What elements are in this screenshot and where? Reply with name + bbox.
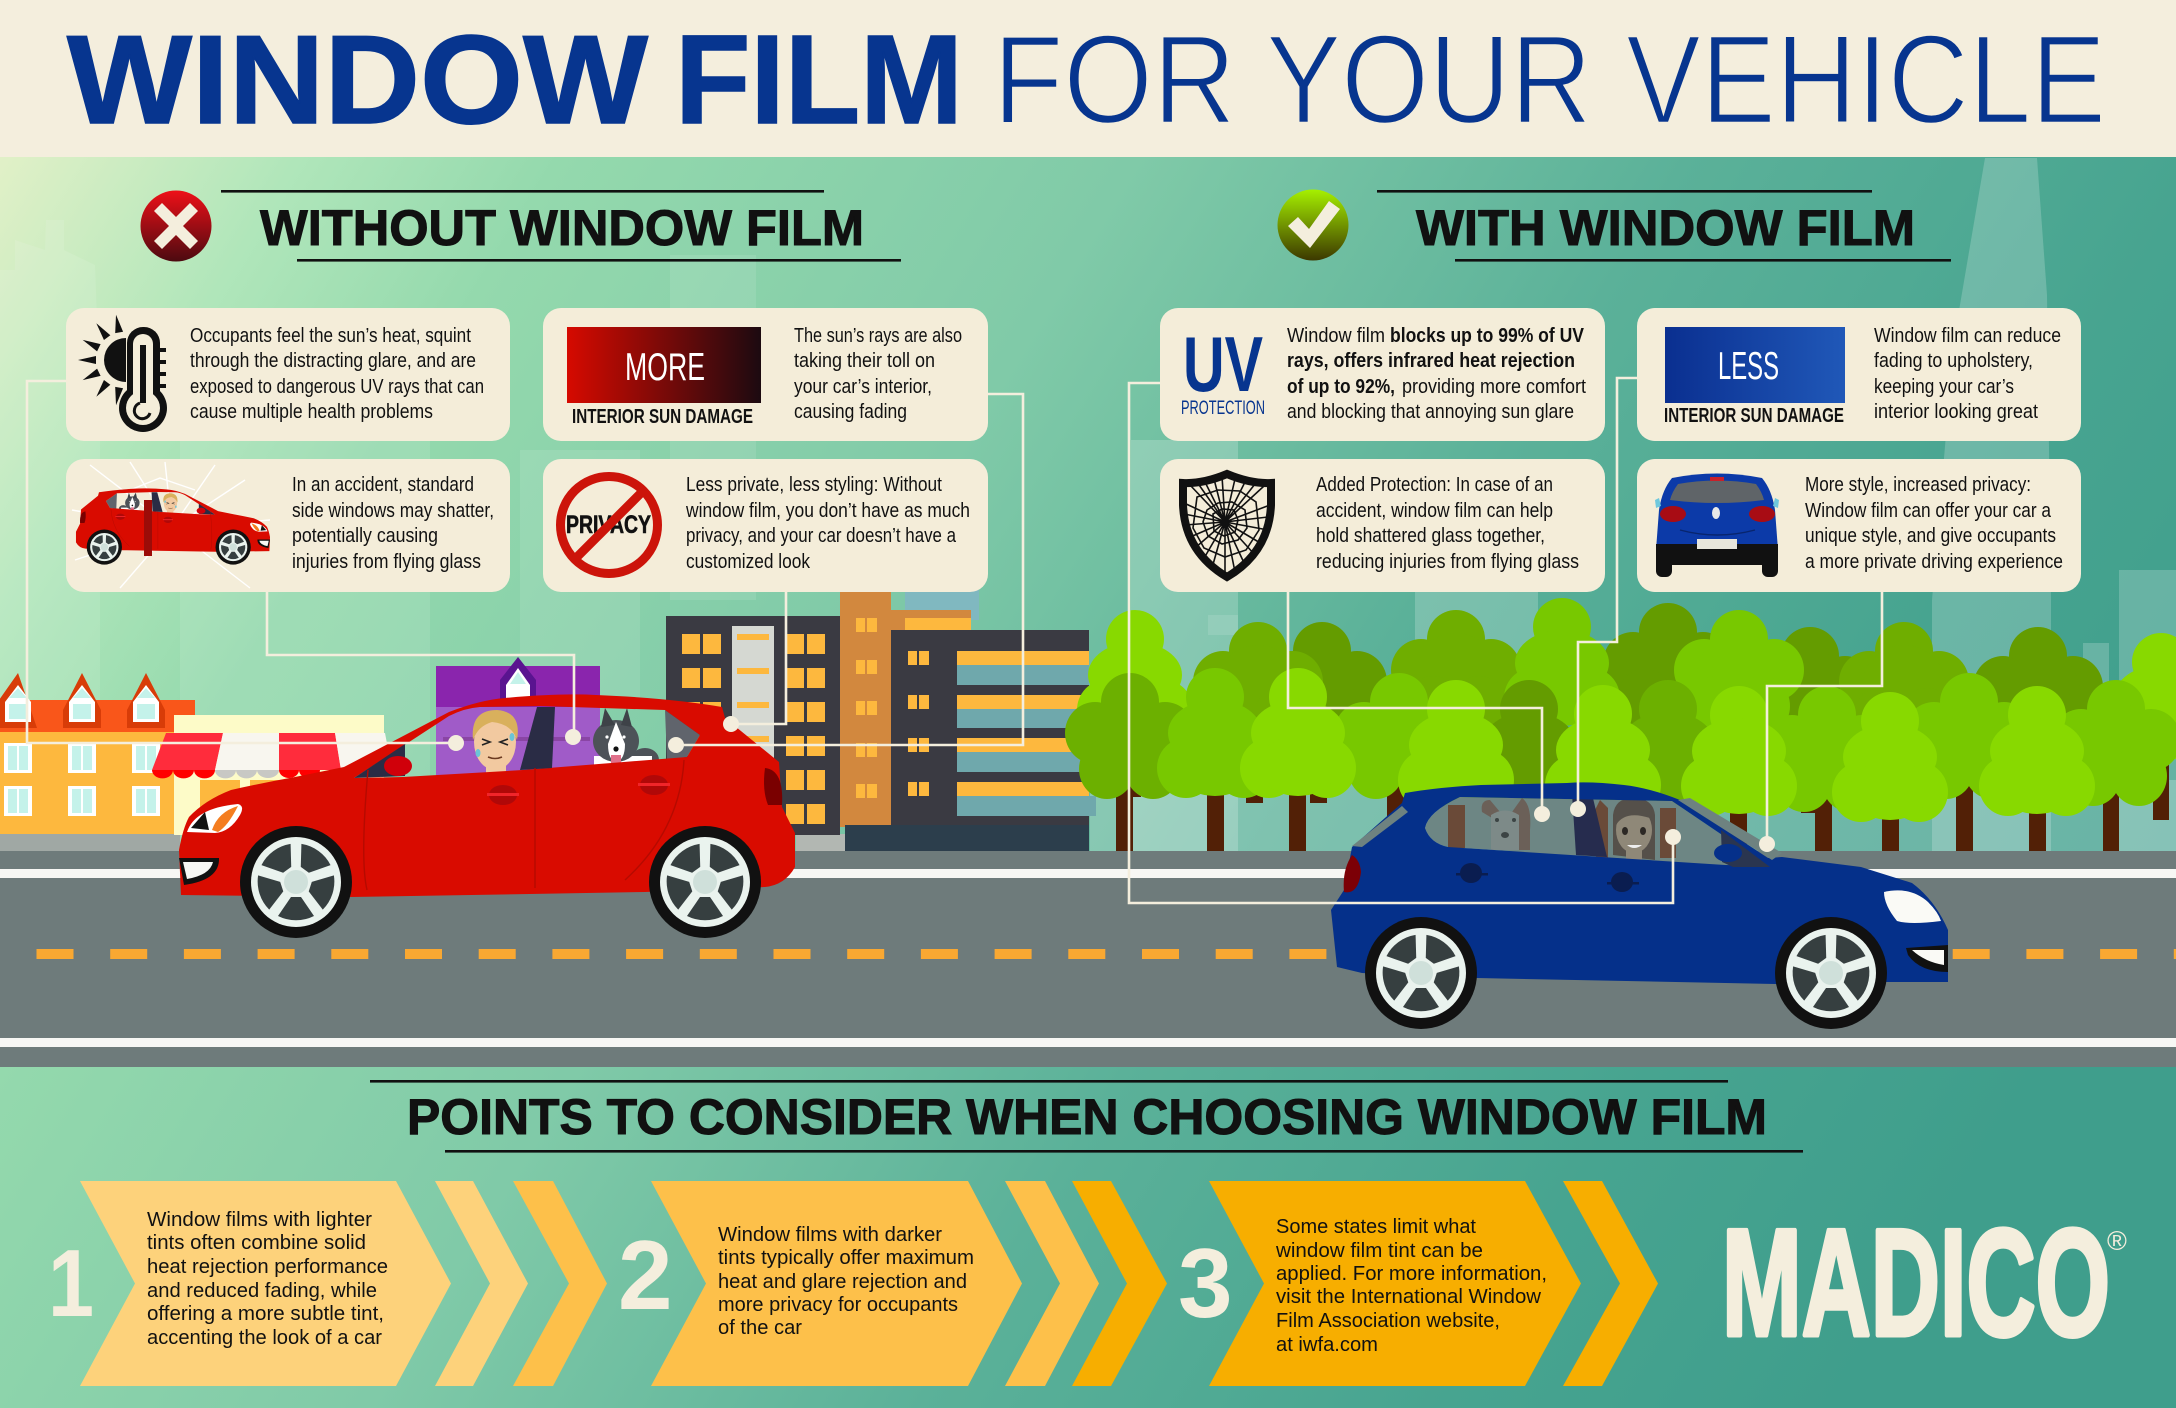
label: interior sun damage: INTERIOR SUN DAMAGE [1664,405,1844,427]
panel: heat and glare [66,308,510,441]
text: heat and glare: cause multiple health problems [190,401,433,423]
title: window film: WINDOW [67,9,648,150]
text: uv protection: Window film [1287,325,1385,347]
callout connector lines [27,378,1882,903]
text: uv protection: rays, offers infrared heat rejection [1287,350,1575,372]
road [0,851,2176,1067]
text: less private [685,474,970,573]
number 3: 3 [1178,1228,1233,1338]
text: fading: The sun’s rays are also [794,325,962,347]
text: point 1: tints often combine solid [147,1232,366,1254]
icon: no privacy [560,476,658,574]
title: for your vehicle: FOR [993,9,1236,150]
title: window film: FILM [675,9,963,150]
logo: madico: ® [2107,1226,2127,1256]
text: heat and glare: exposed to dangerous UV rays that can [190,376,484,398]
text: shattered windows [292,474,494,573]
text: fading [794,325,962,423]
text: uv protection: blocks up to 99% of UV [1390,325,1585,347]
text: fading: causing fading [794,401,907,423]
callout dots [448,716,1775,852]
badge: less: LESS [1718,345,1779,388]
blue car [1331,782,1948,1029]
text: point 3 [1275,1216,1547,1356]
text: point 1: offering a more subtle tint, [147,1303,384,1325]
number 1: 1 [48,1230,94,1337]
panel: shattered windows [66,459,510,592]
text: more style: a more private driving experience [1805,551,2063,573]
text: less fading: Window film can reduce [1874,325,2061,347]
text: uv protection: providing more comfort [1402,376,1586,398]
chevrons 1 [435,1181,607,1386]
heading: points to consider: POINTS TO CONSIDER WHEN CHOOSING WINDOW FILM [407,1089,1767,1145]
text: point 1: Window films with lighter [147,1209,372,1231]
skyline silhouettes [0,158,2176,851]
text: uv protection: and blocking that annoying sun glare [1287,401,1574,423]
heading: with window film: WITH WINDOW FILM [1416,200,1915,256]
text: more style: More style, increased privacy: [1805,474,2031,496]
trees [1065,598,2176,851]
icon: no privacy: PRIVACY [566,511,651,539]
text: point 2 [718,1224,974,1339]
text: less fading: fading to upholstery, [1874,350,2033,372]
text: more style: Window film can offer your car a [1805,500,2052,522]
red car [179,694,795,938]
text: point 1: and reduced fading, while [147,1280,377,1302]
text: point 3: applied. For more information, [1276,1263,1547,1285]
text: less fading [1874,325,2061,423]
text: point 2: of the car [718,1317,802,1339]
text: point 2: more privacy for occupants [718,1294,958,1316]
text: point 1: accenting the look of a car [147,1327,382,1349]
point 1 [48,1181,607,1386]
panel: less interior damage [1637,308,2081,441]
text: fading: your car’s interior, [794,376,932,398]
buildings: left street [0,590,1096,851]
text: uv protection: of up to 92%, [1287,376,1395,398]
text: added protection: accident, window film can help [1316,500,1553,522]
title: for your vehicle: YOUR [1266,9,1592,150]
text: added protection [1316,474,1579,573]
text: less private: Less private, less styling: Without [686,474,942,496]
point 3 [1178,1181,1658,1386]
text: point 3: Film Association website, [1276,1310,1500,1332]
text: shattered windows: side windows may shatter, [292,500,494,522]
icon: red x [140,190,212,262]
text: point 3: visit the International Window [1276,1286,1542,1308]
text: added protection: reducing injuries from flying glass [1316,551,1579,573]
panel: less private [543,459,988,592]
text: less fading: interior looking great [1874,401,2038,423]
title: window film [67,9,963,150]
text: added protection: hold shattered glass together, [1316,525,1545,547]
point 2 [618,1181,1167,1386]
text: more style [1805,474,2063,573]
text: point 2: Window films with darker [718,1224,942,1246]
text: shattered windows: In an accident, standard [292,474,474,496]
icon: blue car rear [1655,474,1779,577]
arrow 2 [651,1181,1022,1386]
icon: red car with cracks [72,462,270,588]
text: point 2: heat and glare rejection and [718,1271,967,1293]
icon: cracked shield [1183,474,1271,577]
arrow 1 [80,1181,451,1386]
text: point 2: tints typically offer maximum [718,1247,974,1269]
text: point 1: heat rejection performance [147,1256,388,1278]
badge: more: MORE [625,346,705,389]
text: more style: unique style, and give occupants [1805,525,2056,547]
number 2: 2 [618,1220,673,1330]
panel: uv protection [1160,308,1605,441]
text: less private: customized look [686,551,811,573]
icon: uv [1181,320,1265,419]
text: shattered windows: potentially causing [292,525,438,547]
arrow 3 [1209,1181,1581,1386]
text: less fading: keeping your car’s [1874,376,2014,398]
text: shattered windows: injuries from flying glass [292,551,481,573]
label: interior sun damage: INTERIOR SUN DAMAGE [572,406,753,428]
text: uv protection [1287,325,1586,423]
text: added protection: Added Protection: In case of an [1316,474,1553,496]
icon: green check [1278,190,1348,260]
text: heat and glare [190,325,484,423]
title: for your vehicle [993,9,2106,150]
text: heat and glare: Occupants feel the sun’s heat, squint [190,325,471,347]
icon: uv: UV [1183,320,1263,408]
badge: less [1665,327,1845,403]
text: less private: privacy, and your car doesn’t have a [686,525,957,547]
badge: more [567,327,761,403]
panel: more interior damage [543,308,988,441]
panel: added protection [1160,459,1605,592]
icon: uv: PROTECTION [1181,398,1265,419]
text: heat and glare: through the distracting glare, and are [190,350,476,372]
text: point 1 [147,1209,388,1349]
title: for your vehicle: VEHICLE [1626,9,2106,150]
title band [0,0,2176,157]
heading: without window film: WITHOUT WINDOW FILM [260,200,864,256]
chevrons 2 [1005,1181,1167,1386]
text: point 3: window film tint can be [1275,1240,1483,1262]
icon: sun thermometer [78,314,167,432]
text: fading: taking their toll on [794,350,935,372]
panel: more style [1637,459,2081,592]
chevron 3 [1563,1181,1658,1386]
text: point 3: Some states limit what [1276,1216,1476,1238]
text: less private: window film, you don’t have as much [685,500,970,522]
text: point 3: at iwfa.com [1276,1334,1378,1356]
